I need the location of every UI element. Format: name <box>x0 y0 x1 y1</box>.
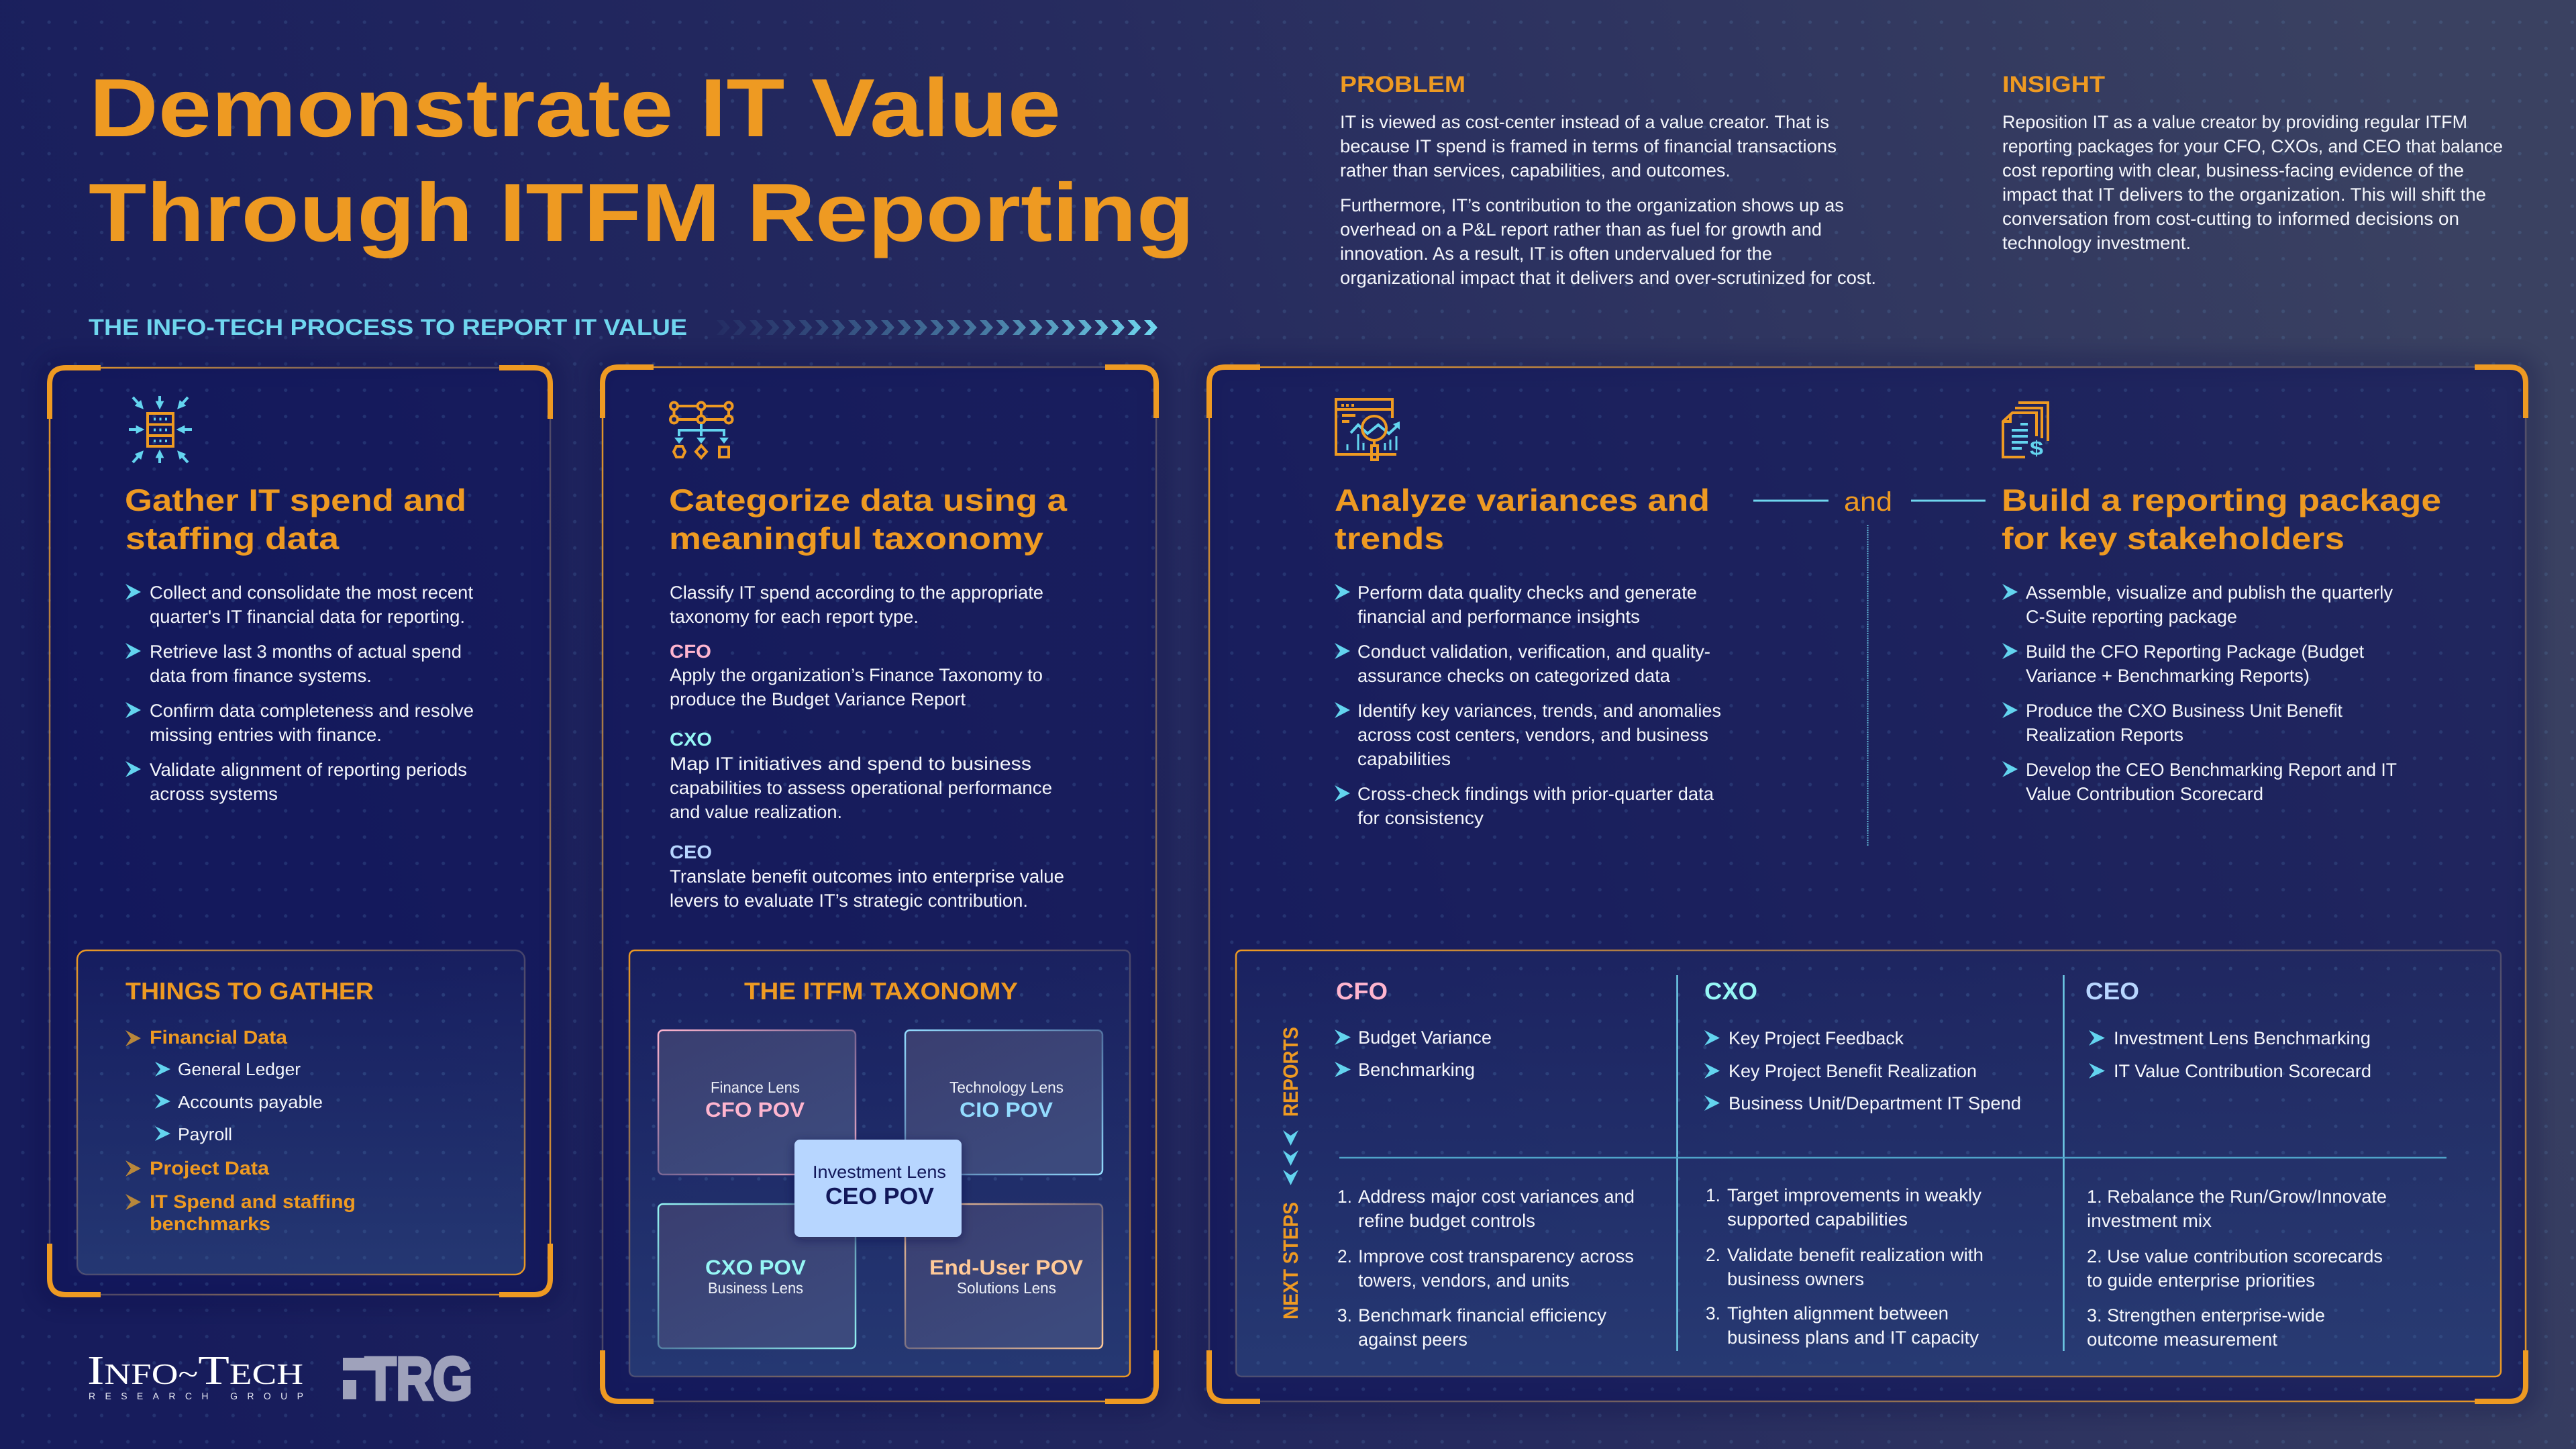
text block: problem: innovation. As a result, IT is often undervalued for the <box>1340 244 1772 264</box>
section subtitle: THE INFO-TECH PROCESS TO REPORT IT VALUE <box>89 315 687 340</box>
text block: CFO taxonomy <box>670 641 1043 709</box>
column: CFO next steps: refine budget controls <box>1358 1211 1535 1231</box>
text block: problem: IT is viewed as cost-center instead of a value creator. That is <box>1340 112 1829 132</box>
column: CXO reports: Key Project Feedback <box>1729 1028 1904 1048</box>
card: CFO POV: CFO POV <box>705 1098 805 1121</box>
bullet list: build: Variance + Benchmarking Reports) <box>2026 666 2310 686</box>
bullet list: build: Produce the CXO Business Unit Benefit <box>2026 701 2342 721</box>
column: CFO next steps: towers, vendors, and units <box>1358 1270 1569 1291</box>
bullet list: build: Realization Reports <box>2026 725 2183 745</box>
panel: things to gather: THINGS TO GATHER <box>125 977 374 1005</box>
icon: analysis window with magnifier <box>1336 399 1400 460</box>
heading: gather: Gather IT spend and <box>125 483 466 517</box>
column: CFO reports: Benchmarking <box>1358 1060 1475 1080</box>
text block: problem <box>1340 72 1876 288</box>
column: CEO next steps: 2. Use value contribution scorecards <box>2087 1246 2383 1266</box>
bullet list: analyze: assurance checks on categorized data <box>1357 666 1671 686</box>
card: CEO POV: Investment Lens <box>813 1162 946 1182</box>
panel: categorize <box>597 362 1162 1407</box>
column: CXO next steps: 2. <box>1706 1245 1720 1265</box>
panel: things to gather: IT Spend and staffing <box>150 1191 356 1212</box>
text block: CFO taxonomy: produce the Budget Variance Report <box>670 689 966 709</box>
text block: categorize intro <box>670 583 1043 627</box>
card: CEO POV <box>794 1140 962 1237</box>
title: Through ITFM Reporting <box>89 167 1194 259</box>
panel: things to gather: benchmarks <box>150 1213 270 1234</box>
column: CFO next steps <box>1337 1187 1635 1350</box>
text block: insight: cost reporting with clear, business-facing evidence of the <box>2002 160 2464 181</box>
bullet list: gather: across systems <box>150 784 278 804</box>
panel: analyze and build <box>1204 362 2531 1407</box>
text block: problem: PROBLEM <box>1340 72 1465 97</box>
heading: build <box>2002 483 2441 556</box>
bullet list: build: Build the CFO Reporting Package (Budget <box>2026 642 2364 662</box>
panel: things to gather: Financial Data <box>150 1027 287 1048</box>
text block: categorize intro: taxonomy for each report type. <box>670 607 919 627</box>
heading: categorize: meaningful taxonomy <box>669 521 1043 556</box>
column: CEO next steps: 1. Rebalance the Run/Grow/Innovate <box>2087 1187 2387 1207</box>
bullet list: build: C-Suite reporting package <box>2026 607 2237 627</box>
bullet list: gather: Collect and consolidate the most recent <box>150 583 474 603</box>
heading: categorize <box>669 483 1067 556</box>
column: CFO next steps: Improve cost transparency across <box>1358 1246 1634 1266</box>
card: End-User POV: End-User POV <box>929 1256 1083 1279</box>
card: CIO POV: CIO POV <box>960 1098 1053 1121</box>
heading: build: for key stakeholders <box>2002 521 2345 556</box>
bullet list: build: Value Contribution Scorecard <box>2026 784 2263 804</box>
text block: problem: Furthermore, IT’s contribution to the organization shows up as <box>1340 195 1844 215</box>
icon: report package documents: $ <box>2030 438 2043 460</box>
bullet list: gather: Confirm data completeness and resolve <box>150 701 474 721</box>
column: CFO next steps: 3. <box>1337 1305 1352 1326</box>
bullet list: build: Develop the CEO Benchmarking Report and IT <box>2026 760 2397 780</box>
bullet list: analyze: Perform data quality checks and generate <box>1357 583 1697 603</box>
column: CXO reports <box>1704 977 2021 1113</box>
card: CXO POV: CXO POV <box>705 1256 806 1279</box>
panel: the ITFM taxonomy: THE ITFM TAXONOMY <box>744 977 1018 1005</box>
heading: analyze: trends <box>1335 521 1444 556</box>
column: CEO next steps: outcome measurement <box>2087 1330 2278 1350</box>
connector: and: and <box>1844 487 1892 517</box>
heading: analyze: Analyze variances and <box>1335 483 1710 517</box>
text block: problem: overhead on a P&L report rather than as fuel for growth and <box>1340 219 1822 240</box>
card: CFO POV <box>658 1030 856 1175</box>
column: CFO reports <box>1335 977 1492 1080</box>
text block: problem: rather than services, capabilities, and outcomes. <box>1340 160 1731 181</box>
title <box>89 62 1194 259</box>
bullet list: gather: Retrieve last 3 months of actual spend <box>150 642 462 662</box>
bullet list: analyze: Cross-check findings with prior-quarter data <box>1357 784 1714 804</box>
card: CXO POV <box>658 1204 856 1348</box>
column: CXO next steps: Target improvements in weakly <box>1727 1185 1981 1205</box>
panel: things to gather <box>77 950 525 1275</box>
bullet list: analyze: capabilities <box>1357 749 1451 769</box>
text block: insight <box>2002 72 2503 253</box>
card: CEO POV: CEO POV <box>825 1183 935 1209</box>
bullet list: analyze: Identify key variances, trends, and anomalies <box>1357 701 1721 721</box>
text block: CXO taxonomy: and value realization. <box>670 802 842 822</box>
text block: CEO taxonomy: CEO <box>670 842 712 862</box>
text block: CXO taxonomy: capabilities to assess operational performance <box>670 778 1052 798</box>
axis label: reports to next steps <box>1279 1027 1302 1319</box>
bullet list: build <box>2002 583 2397 804</box>
arrow: chevron progress row <box>717 320 1157 335</box>
column: CFO next steps: against peers <box>1358 1330 1467 1350</box>
text block: insight: conversation from cost-cutting to informed decisions on <box>2002 209 2459 229</box>
bullet list: gather: missing entries with finance. <box>150 725 382 745</box>
logo: ITRG: TRG <box>365 1346 472 1413</box>
text block: CXO taxonomy: Map IT initiatives and spend to business <box>670 754 1031 774</box>
column: CEO reports: IT Value Contribution Scorecard <box>2114 1061 2371 1081</box>
column: CXO next steps <box>1706 1185 1983 1348</box>
text block: insight: technology investment. <box>2002 233 2191 253</box>
text block: CFO taxonomy: CFO <box>670 641 711 662</box>
column: CFO next steps: Benchmark financial efficiency <box>1358 1305 1607 1326</box>
text block: insight: reporting packages for your CFO, CXOs, and CEO that balance <box>2002 136 2503 156</box>
heading: gather <box>125 483 466 556</box>
title: Demonstrate IT Value <box>89 62 1061 154</box>
column: CEO reports: Investment Lens Benchmarking <box>2114 1028 2371 1048</box>
card: CXO POV: Business Lens <box>708 1279 803 1297</box>
icon: taxonomy tree <box>670 403 733 458</box>
card: CIO POV <box>905 1030 1102 1175</box>
heading: categorize: Categorize data using a <box>669 483 1067 517</box>
card: End-User POV <box>905 1204 1102 1348</box>
bullet list: analyze: Conduct validation, verification, and quality- <box>1357 642 1710 662</box>
bullet list: gather: quarter's IT financial data for reporting. <box>150 607 465 627</box>
axis label: reports to next steps: REPORTS <box>1279 1027 1302 1117</box>
axis label: reports to next steps: NEXT STEPS <box>1279 1202 1302 1319</box>
column: CXO next steps: 1. <box>1706 1185 1720 1205</box>
column: CXO next steps: Tighten alignment between <box>1727 1303 1949 1323</box>
text block: CXO taxonomy: CXO <box>670 729 712 750</box>
text block: insight: INSIGHT <box>2002 72 2105 97</box>
column: CEO next steps: 3. Strengthen enterprise-wide <box>2087 1305 2325 1326</box>
column: CEO next steps: investment mix <box>2087 1211 2212 1231</box>
bullet list: analyze: financial and performance insights <box>1357 607 1640 627</box>
column: CEO reports <box>2085 977 2371 1081</box>
heading: gather: staffing data <box>125 521 339 556</box>
column: CFO reports: Budget Variance <box>1358 1028 1492 1048</box>
panel: things to gather: Accounts payable <box>178 1092 323 1112</box>
panel: reports and next steps <box>1236 950 2501 1377</box>
card: End-User POV: Solutions Lens <box>957 1279 1056 1297</box>
column: CXO reports: Business Unit/Department IT Spend <box>1729 1093 2021 1113</box>
text block: categorize intro: Classify IT spend according to the appropriate <box>670 583 1043 603</box>
text block: insight: Reposition IT as a value creator by providing regular ITFM <box>2002 112 2467 132</box>
column: CXO next steps: business plans and IT capacity <box>1727 1328 1979 1348</box>
panel: things to gather: Payroll <box>178 1124 232 1144</box>
card: CFO POV: Finance Lens <box>711 1079 800 1096</box>
panel: gather <box>44 362 556 1300</box>
text block: CEO taxonomy: Translate benefit outcomes into enterprise value <box>670 866 1064 887</box>
bullet list: analyze <box>1335 583 1721 828</box>
text block: CXO taxonomy <box>670 729 1052 822</box>
bullet list: gather: Validate alignment of reporting periods <box>150 760 467 780</box>
bullet list: analyze: across cost centers, vendors, and business <box>1357 725 1708 745</box>
column: CXO next steps: business owners <box>1727 1269 1864 1289</box>
heading: build: Build a reporting package <box>2002 483 2441 517</box>
bullet list: gather <box>125 583 474 804</box>
text block: problem: because IT spend is framed in terms of financial transactions <box>1340 136 1837 156</box>
column: CXO next steps: Validate benefit realization with <box>1727 1245 1983 1265</box>
column: CFO reports: CFO <box>1336 977 1388 1005</box>
bullet list: build: Assemble, visualize and publish the quarterly <box>2026 583 2393 603</box>
column: CXO next steps: supported capabilities <box>1727 1209 1908 1230</box>
logo: Info-Tech Research Group: RESEARCH GROUP <box>89 1391 303 1401</box>
column: CEO next steps: to guide enterprise priorities <box>2087 1270 2315 1291</box>
column: CFO next steps: 2. <box>1337 1246 1352 1266</box>
column: CEO reports: CEO <box>2085 977 2139 1005</box>
column: CXO reports: Key Project Benefit Realization <box>1729 1061 1977 1081</box>
icon: report package documents <box>2003 403 2048 460</box>
panel: the ITFM taxonomy <box>629 950 1130 1377</box>
text block: CFO taxonomy: Apply the organization’s Finance Taxonomy to <box>670 665 1043 685</box>
card: CIO POV: Technology Lens <box>949 1079 1064 1096</box>
column: CFO next steps: 1. <box>1337 1187 1352 1207</box>
text block: problem: organizational impact that it delivers and over-scrutinized for cost. <box>1340 268 1876 288</box>
bullet list: gather: data from finance systems. <box>150 666 372 686</box>
heading: analyze <box>1335 483 1710 556</box>
bullet list: analyze: for consistency <box>1357 808 1484 828</box>
panel: things to gather: Project Data <box>150 1158 269 1179</box>
column: CXO reports: CXO <box>1704 977 1757 1005</box>
column: CXO next steps: 3. <box>1706 1303 1720 1323</box>
text block: CEO taxonomy <box>670 842 1064 911</box>
text block: insight: impact that IT delivers to the organization. This will shift the <box>2002 185 2486 205</box>
panel: things to gather: General Ledger <box>178 1059 301 1079</box>
text block: CEO taxonomy: levers to evaluate IT’s strategic contribution. <box>670 891 1028 911</box>
logo: Info-Tech Research Group: INFO~ TECH <box>87 1348 303 1393</box>
icon: server with inward arrows <box>129 396 192 463</box>
column: CEO next steps <box>2087 1187 2387 1350</box>
column: CFO next steps: Address major cost variances and <box>1358 1187 1635 1207</box>
